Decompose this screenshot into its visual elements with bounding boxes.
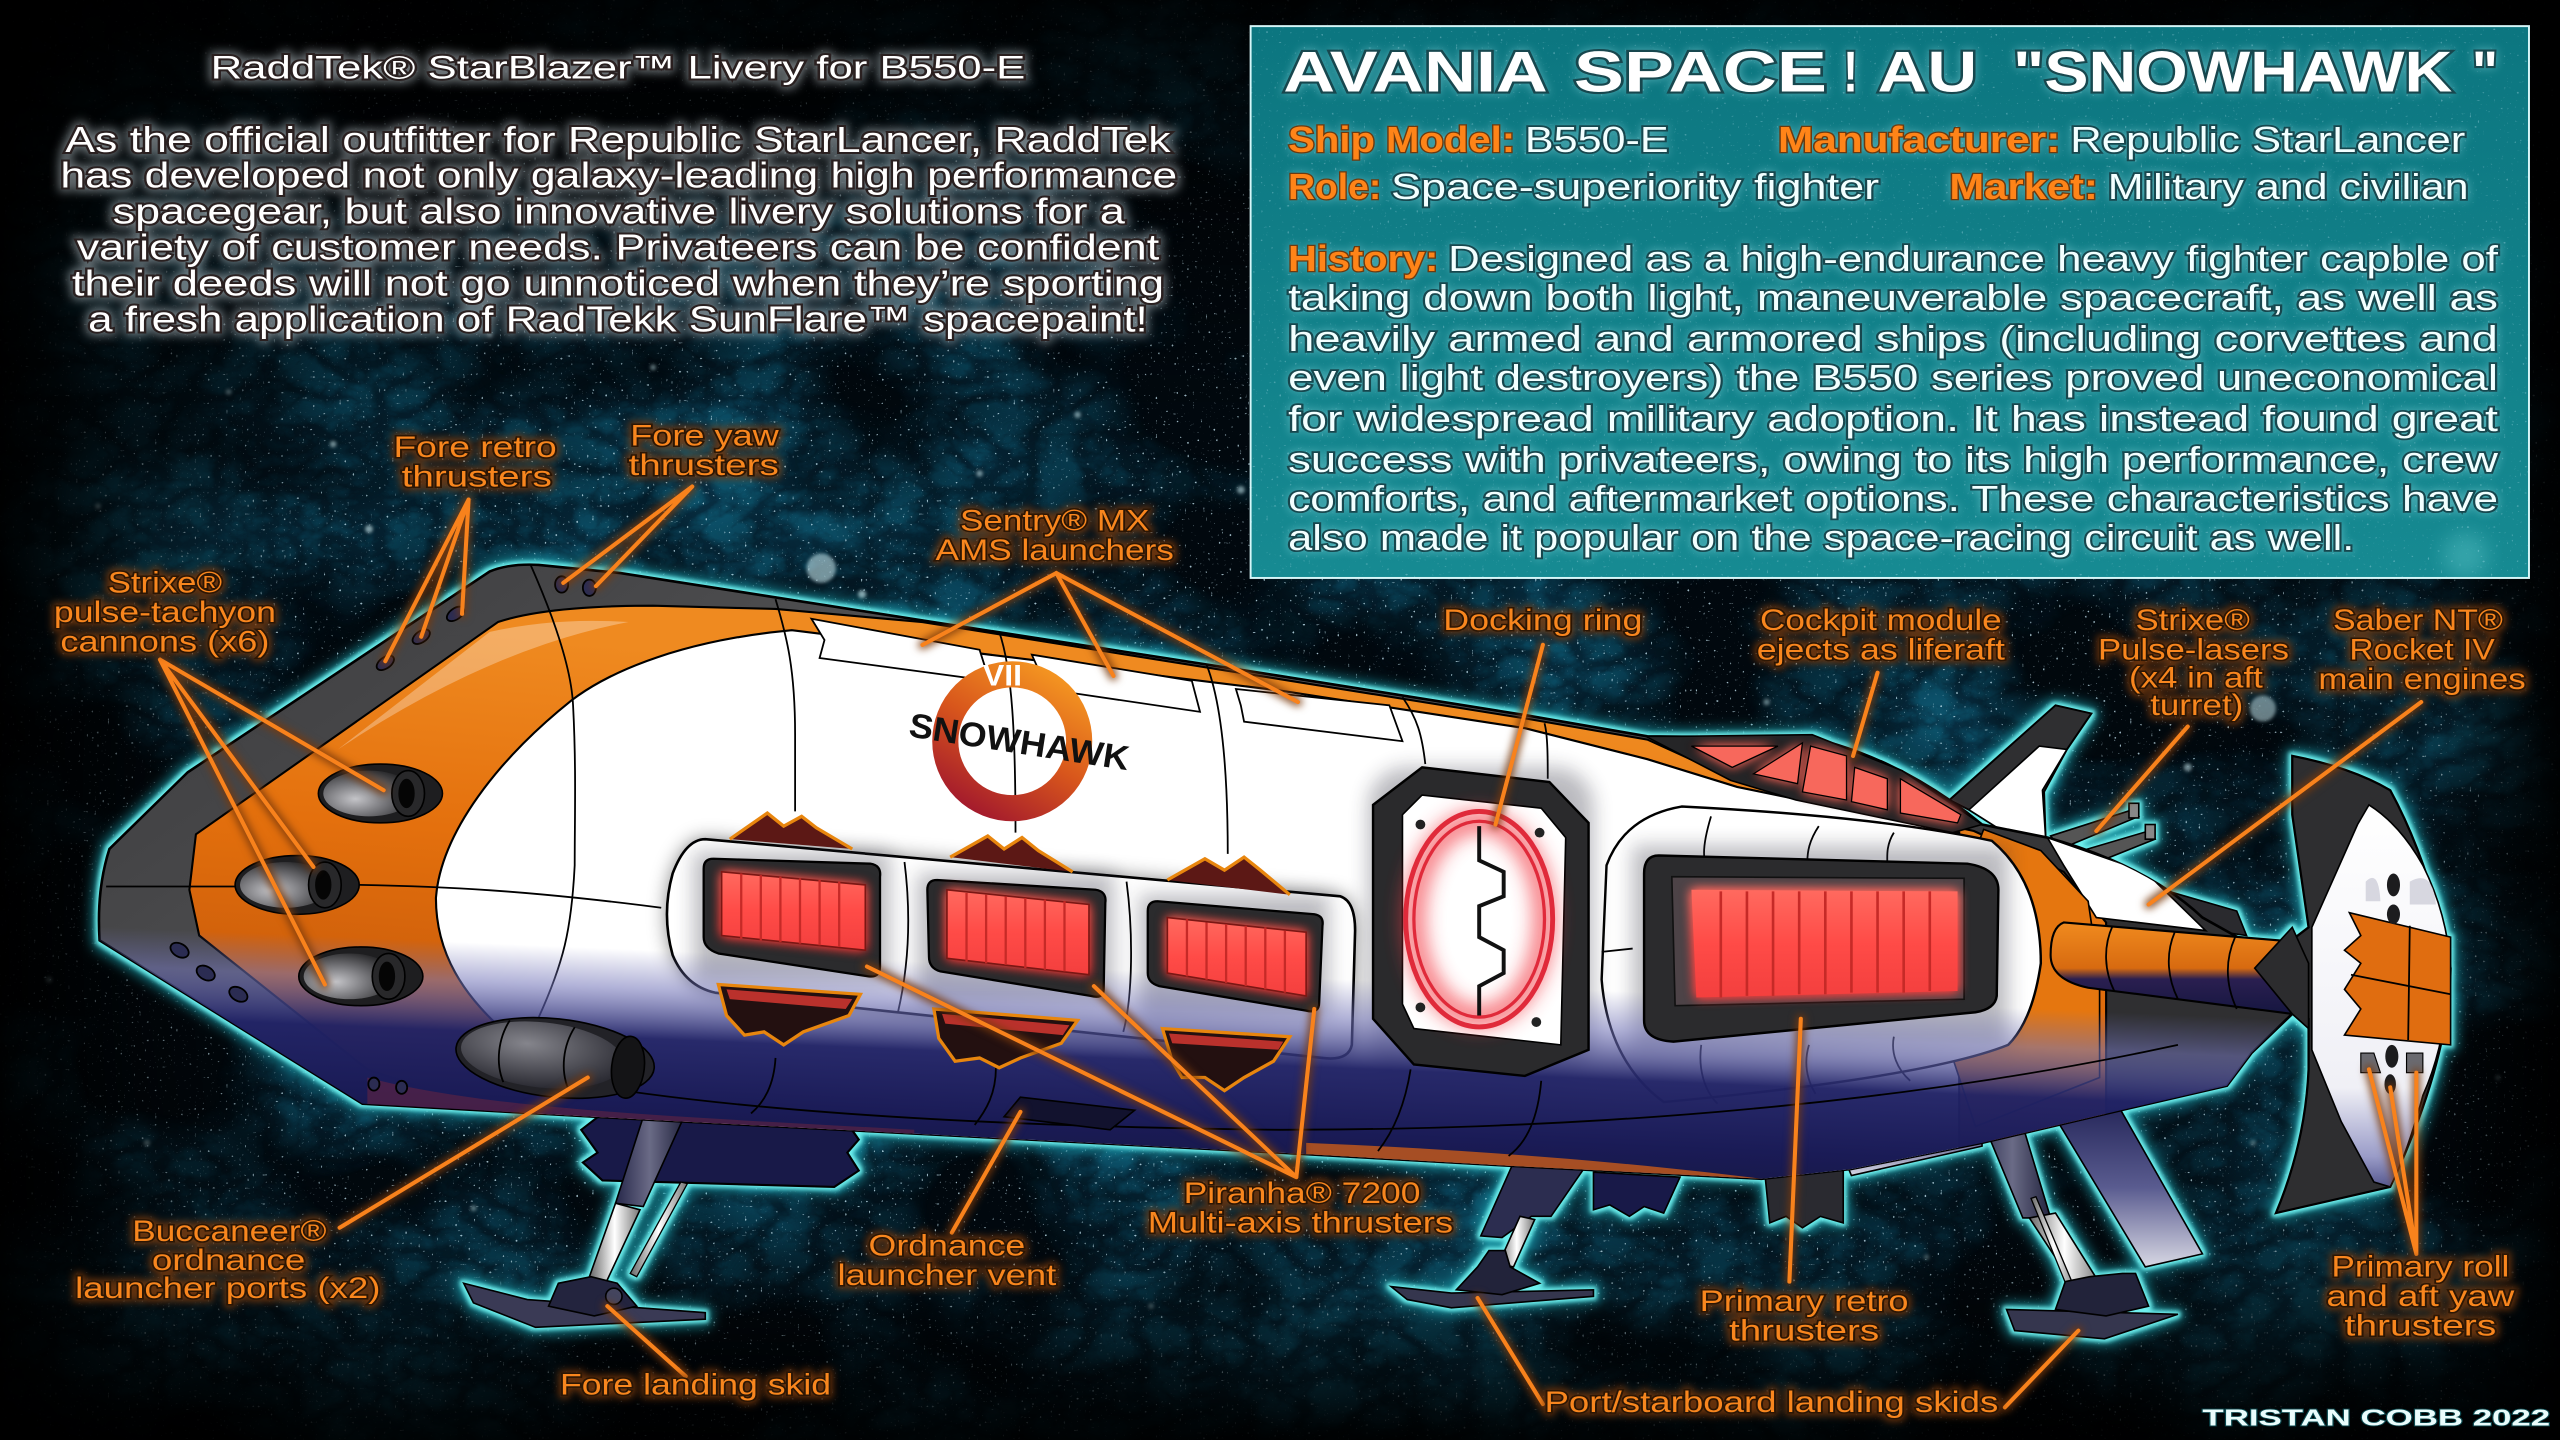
tail thruster nozzles (2384, 873, 2400, 1094)
label: cockpit module: Cockpit module (1760, 604, 2002, 637)
label: buccaneer ports: Buccaneer® (132, 1215, 327, 1248)
intro text block: RaddTek livery (60, 48, 1177, 339)
dorsal fin (1949, 705, 2091, 841)
aft white section (2047, 838, 2206, 931)
label: cockpit module: ejects as liferaft (1757, 634, 2005, 667)
strixe cannon 1 (318, 764, 442, 823)
arrow: pulse lasers (2096, 727, 2188, 831)
label: buccaneer ports: ordnance (152, 1244, 305, 1277)
label: strixe pulse-tachyon cannons (54, 567, 276, 658)
tail fin (2255, 756, 2451, 1213)
cockpit canopy (1646, 735, 1982, 833)
label: saber main engines: Saber NT® (2333, 604, 2503, 637)
label: fore retro thrusters (393, 431, 557, 494)
arrow: cockpit module (1853, 673, 1878, 756)
label: port/starboard landing skids: Port/starboard landing skids (1544, 1386, 1998, 1419)
label: strixe pulse-lasers: Strixe® (2136, 604, 2250, 637)
ship specs: Ship Model: (1288, 119, 1515, 160)
callout labels (54, 420, 2526, 1419)
arrow: primary roll thrusters (2369, 1069, 2416, 1254)
Piranha vents (718, 813, 1290, 1091)
arrow: fore landing skid (607, 1306, 686, 1376)
label: sentry launchers (936, 505, 1174, 567)
label: sentry launchers: AMS launchers (936, 534, 1174, 567)
label: strixe pulse-lasers (2098, 604, 2289, 722)
history paragraph: taking down both light, maneuverable spacecraft, as well as (1288, 277, 2498, 318)
label: cockpit module (1757, 604, 2005, 667)
label: primary retro thrusters (1700, 1285, 1909, 1347)
paragraph: livery description: spacegear, but also innovative livery solutions for a (113, 191, 1125, 232)
label: ordnance vent (838, 1230, 1056, 1292)
label: piranha thrusters: Piranha® 7200 (1184, 1177, 1420, 1210)
history paragraph: Designed as a high-endurance heavy fighter capble of (1448, 238, 2499, 279)
lower hull purple and orange reflection (367, 1078, 914, 1143)
arrow: piranha thrusters (867, 967, 1314, 1177)
label: strixe pulse-lasers: turret) (2150, 689, 2243, 722)
ship specs: Republic StarLancer (2070, 119, 2465, 160)
docking ring (1373, 767, 1589, 1076)
history paragraph: comforts, and aftermarket options. These characteristics have (1288, 478, 2498, 519)
label: buccaneer ports: launcher ports (x2) (75, 1272, 380, 1305)
arrow: buccaneer ports (340, 1078, 588, 1228)
label: primary roll thrusters: Primary roll (2331, 1251, 2509, 1284)
strixe cannon 2 (235, 856, 359, 914)
thruster housing (667, 839, 1355, 1059)
paragraph: livery description (60, 119, 1177, 339)
tail orange section (2344, 913, 2451, 1045)
paragraph: livery description: a fresh application of RadTekk SunFlare™ spacepaint! (88, 298, 1148, 339)
big primary retro window (1644, 856, 1998, 1042)
label: primary retro thrusters: Primary retro (1700, 1285, 1909, 1318)
paragraph: livery description: their deeds will not go unnoticed when they’re sporting (72, 263, 1164, 304)
label: strixe pulse-tachyon cannons: pulse-tachyon (54, 596, 276, 629)
label: strixe pulse-lasers: Pulse-lasers (2098, 634, 2289, 667)
soft grey smudges around windows and ring (694, 767, 2008, 1078)
label: sentry launchers: Sentry® MX (960, 505, 1149, 538)
Snowhawk logo: SNOWHAWK (907, 707, 1132, 778)
history paragraph: for widespread military adoption. It has instead found great (1288, 398, 2498, 439)
paragraph: livery description: As the official outfitter for Republic StarLancer, RaddTek (65, 119, 1171, 160)
navy underside shading (0, 914, 2449, 1241)
panel title (1283, 40, 2498, 104)
buccaneer launcher port (452, 1009, 658, 1107)
panel: ship data (1251, 26, 2529, 578)
label: primary roll thrusters: and aft yaw (2327, 1280, 2515, 1313)
history paragraph: History: (1288, 238, 1438, 279)
label: strixe pulse-lasers: (x4 in aft (2129, 661, 2263, 694)
label: fore landing skid: Fore landing skid (560, 1368, 831, 1401)
paragraph: livery description: variety of customer needs. Privateers can be confident (77, 227, 1159, 268)
ship specs: B550-E (1525, 119, 1669, 160)
Snowhawk logo (907, 660, 1132, 808)
arrow: docking ring (1496, 645, 1543, 824)
label: fore retro thrusters: Fore retro (393, 431, 557, 464)
panel title: AU (1878, 40, 1977, 104)
thruster window 1 (704, 859, 880, 977)
label: primary retro thrusters: thrusters (1729, 1314, 1879, 1347)
label: fore yaw thrusters: thrusters (629, 449, 779, 482)
label: strixe pulse-tachyon cannons: Strixe® (108, 567, 222, 600)
aft turret guns (2051, 803, 2155, 865)
arrow: fore yaw thrusters (563, 487, 692, 586)
landing gear: mid (1391, 1127, 1982, 1308)
ordnance vent (1004, 1097, 1135, 1130)
ship specs: Role: (1288, 166, 1381, 207)
arrow: port and starboard skids (1478, 1298, 2078, 1407)
aft body fairing (2163, 890, 2247, 936)
orange livery (189, 606, 2106, 1143)
artist credit: TRISTAN COBB 2022 (2202, 1404, 2550, 1430)
label: saber main engines: main engines (2318, 663, 2526, 696)
hull seams (106, 565, 1548, 1017)
ship specs: Space-superiority fighter (1391, 166, 1879, 207)
arrow: fore retro thrusters (385, 500, 469, 661)
landing gear: fore (464, 1113, 859, 1327)
ship specs: Military and civilian (2108, 166, 2469, 207)
small thruster ports (168, 576, 596, 1094)
label: fore retro thrusters: thrusters (402, 461, 552, 494)
thruster window 3 (1148, 901, 1323, 1011)
strixe cannon 3 (299, 947, 423, 1006)
leader lines (160, 487, 2421, 1407)
history paragraph: even light destroyers) the B550 series proved uneconomical (1288, 357, 2498, 398)
engine tube (2051, 922, 2309, 1029)
spaceship illustration (0, 565, 2451, 1339)
Snowhawk logo: VII (983, 660, 1022, 693)
arrow: main engines (2149, 702, 2421, 904)
history paragraph: success with privateers, owing to its high performance, crew (1288, 439, 2499, 480)
label: buccaneer ports (75, 1215, 380, 1305)
label: ordnance vent: Ordnance (869, 1230, 1025, 1263)
landing gear: aft (1974, 1091, 2202, 1339)
label: primary roll thrusters: thrusters (2344, 1310, 2496, 1343)
label: saber main engines (2318, 604, 2526, 696)
ship specs: Manufacturer: (1778, 119, 2060, 160)
paragraph: livery description: has developed not only galaxy-leading high performance (60, 155, 1177, 196)
history paragraph: also made it popular on the space-racing circuit as well. (1288, 517, 2354, 558)
Sentry launcher hatches (811, 619, 1402, 741)
hull (83, 550, 2298, 1194)
aft thruster pod (1602, 807, 2041, 1102)
label: fore yaw thrusters: Fore yaw (630, 420, 780, 453)
label: primary roll thrusters (2327, 1251, 2515, 1343)
label: ordnance vent: launcher vent (838, 1259, 1056, 1292)
white fuselage (436, 630, 1959, 1192)
panel title: ! (1843, 40, 1858, 104)
history paragraph (1288, 238, 2499, 558)
label: piranha thrusters: Multi-axis thrusters (1148, 1207, 1453, 1240)
history paragraph: heavily armed and armored ships (including corvettes and (1288, 318, 2498, 359)
panel title: AVANIA (1283, 40, 1548, 104)
arrow: sentry launchers (922, 573, 1298, 702)
panel title: SPACE (1574, 40, 1827, 104)
arrow: strixe cannons (160, 660, 384, 984)
label: piranha thrusters (1148, 1177, 1453, 1240)
ship specs: Market: (1949, 166, 2098, 207)
panel title: " (2472, 40, 2498, 104)
label: saber main engines: Rocket IV (2349, 634, 2495, 667)
thruster window 2 (927, 880, 1106, 997)
label: strixe pulse-tachyon cannons: cannons (x6) (60, 625, 269, 658)
label: docking ring: Docking ring (1443, 604, 1642, 637)
arrow: ordnance vent (952, 1112, 1020, 1233)
ship specs (1288, 119, 2469, 207)
label: fore yaw thrusters (629, 420, 780, 482)
arrow: primary retro thrusters (1789, 1019, 1801, 1282)
heading: livery title: RaddTek® StarBlazer™ Livery for B550-E (211, 48, 1025, 85)
panel title: "SNOWHAWK (2013, 40, 2452, 104)
